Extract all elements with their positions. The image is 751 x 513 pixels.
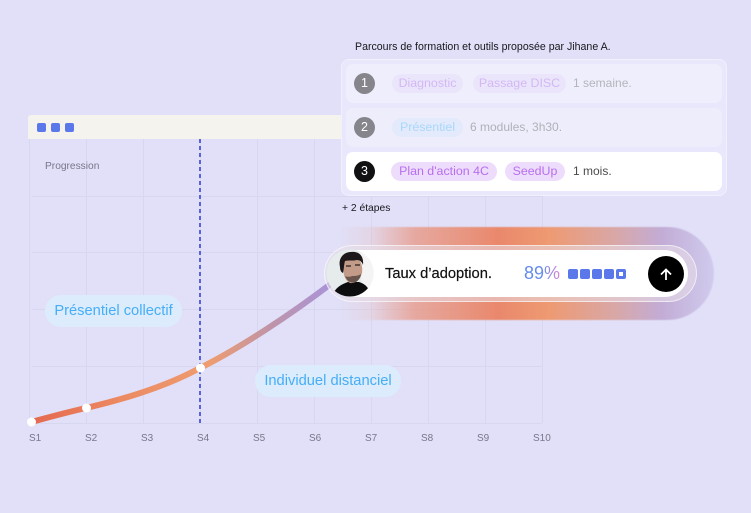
arrow icon (660, 268, 672, 280)
step 2 tag: Présentiel: Présentiel (400, 120, 455, 134)
adoption value: 89% (524, 263, 560, 283)
pill white body (329, 250, 688, 297)
window dots (37, 123, 74, 132)
step 3 number (354, 161, 375, 182)
step 3 tag: Plan d'action 4C: Plan d'action 4C (399, 164, 489, 178)
step 3 text: 1 mois. (573, 164, 612, 178)
step 2 number (354, 117, 375, 138)
axis labels: S9 (477, 433, 489, 444)
chip: Présentiel collectif (45, 295, 182, 327)
axis labels: S3 (141, 433, 153, 444)
axis labels: S1 (29, 433, 41, 444)
axis labels: S2 (85, 433, 97, 444)
step 2 tag: Présentiel (392, 118, 463, 137)
axis labels: S8 (421, 433, 433, 444)
pill label: Taux d’adoption. (385, 266, 492, 282)
step 1 (346, 64, 722, 103)
dashed S4 marker line (199, 139, 201, 423)
step 3 number: 3 (361, 164, 368, 178)
adoption level squares (568, 269, 626, 279)
step 1 tag: Passage DISC: Passage DISC (479, 76, 560, 90)
axis labels (29, 433, 551, 444)
axis labels: S5 (253, 433, 265, 444)
chip: Individuel distanciel (255, 365, 401, 397)
step 1 text: 1 semaine. (573, 76, 632, 90)
step 2 text: 6 modules, 3h30. (470, 120, 562, 134)
chart window title bar (28, 115, 348, 139)
chart label: Progression: Progression (45, 161, 99, 172)
chip: Individuel distanciel: Individuel distanciel (264, 373, 392, 389)
axis labels: S6 (309, 433, 321, 444)
step 3 (346, 152, 722, 191)
curve points (27, 364, 205, 426)
step 1 tag: Diagnostic: Diagnostic (399, 76, 456, 90)
arrow button (648, 256, 684, 292)
panel heading: Parcours de formation et outils proposée par Jihane A. (355, 41, 611, 53)
panel: steps (341, 59, 727, 196)
axis labels: S7 (365, 433, 377, 444)
axis labels: S4 (197, 433, 209, 444)
step 3 tag: SeedUp (505, 162, 565, 181)
step 1 number (354, 73, 375, 94)
step 2 (346, 108, 722, 147)
step 1 tag: Passage DISC (473, 74, 566, 93)
step 2 number: 2 (361, 120, 368, 134)
step 3 tag: Plan d'action 4C (391, 162, 497, 181)
avatar (326, 250, 374, 296)
axis labels: S10 (533, 433, 551, 444)
step 3 tag: SeedUp: SeedUp (513, 164, 557, 178)
chip: Présentiel collectif: Présentiel collectif (54, 303, 173, 319)
glow band behind adoption pill (340, 227, 714, 320)
step 1 tag: Diagnostic (392, 74, 463, 93)
more steps note: + 2 étapes (342, 203, 390, 214)
step 1 number: 1 (361, 76, 368, 90)
adoption pill (324, 245, 697, 302)
